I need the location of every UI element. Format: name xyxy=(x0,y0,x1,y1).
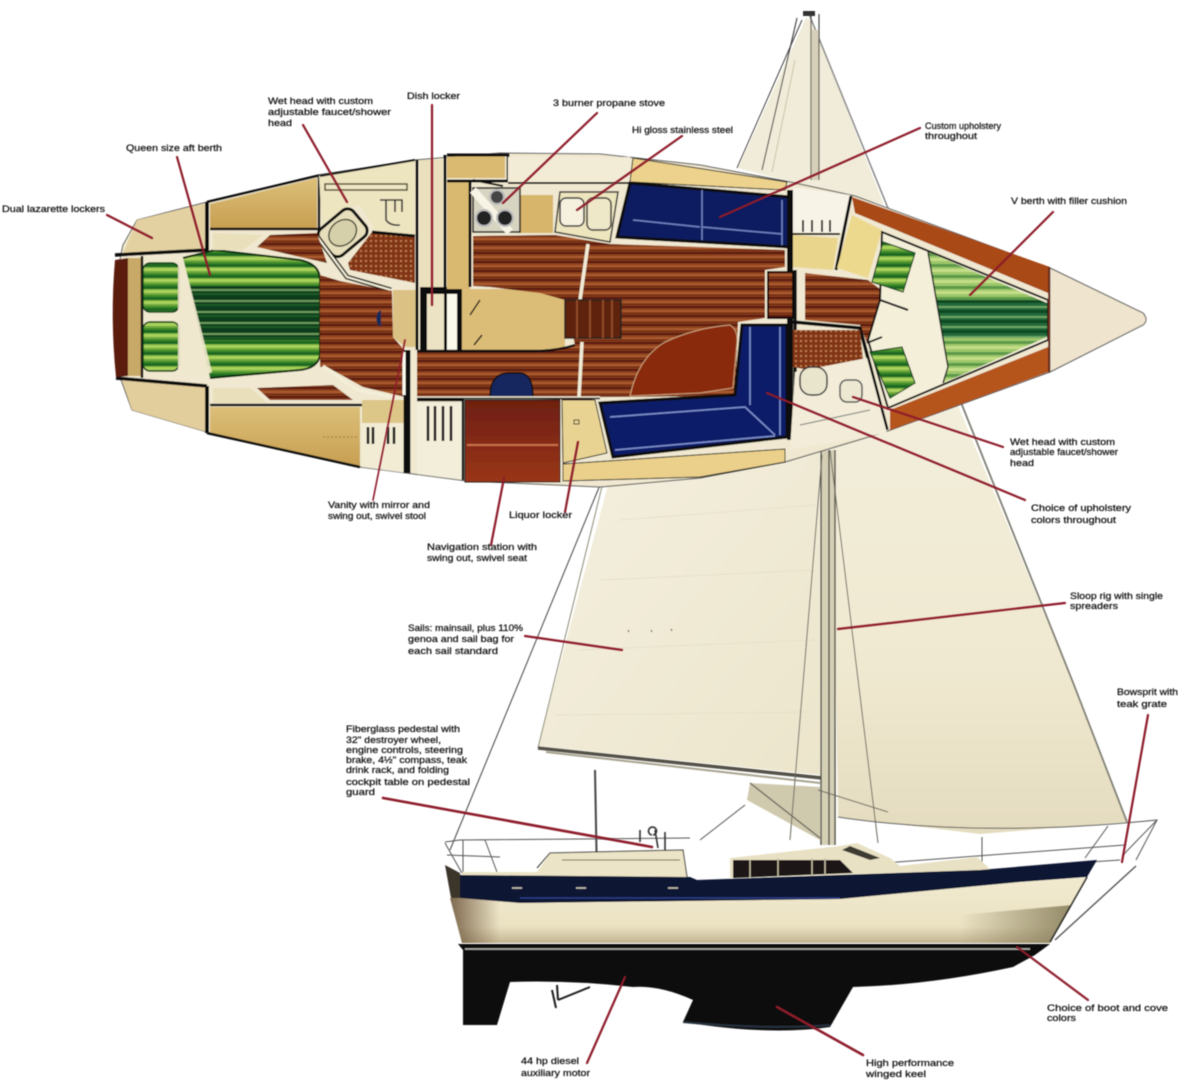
aft cabin wood sole xyxy=(213,233,407,403)
galley sink xyxy=(555,192,618,242)
forward berth base xyxy=(868,232,1048,408)
label: winged keel: High performance xyxy=(866,1058,954,1069)
lower sole edge xyxy=(417,345,600,398)
mainsail xyxy=(538,440,820,775)
label: upholstery xyxy=(925,121,1001,142)
aft storage lockers xyxy=(207,176,362,467)
lazarette lockers xyxy=(115,202,207,433)
galley tan panels xyxy=(447,154,630,350)
label: forward wet head: Wet head with custom xyxy=(1010,437,1115,448)
stern transom xyxy=(445,865,460,898)
yellow upper locker xyxy=(630,158,787,190)
waterline xyxy=(465,948,1030,950)
coach roof and cockpit xyxy=(462,843,990,878)
label: boot and cove: Choice of boot and cove xyxy=(1047,1003,1168,1014)
rails and pulpit xyxy=(445,817,1157,940)
hull topsides xyxy=(450,877,1087,943)
forward bulkhead xyxy=(787,190,793,440)
label: bowsprit: teak grate xyxy=(1117,699,1167,710)
boot stripe top band xyxy=(460,860,1097,903)
label: winged keel xyxy=(865,1058,954,1080)
upper sails above the plan xyxy=(737,11,892,218)
label: pedestal xyxy=(346,724,470,798)
label: navigation station xyxy=(427,542,537,564)
label: forward wet head: head xyxy=(1010,458,1034,469)
V berth cushion xyxy=(925,250,1050,388)
label: aft berth: Queen size aft berth xyxy=(126,143,222,154)
label: pedestal: engine controls, steering xyxy=(346,745,463,756)
berth outline xyxy=(183,250,320,378)
label: sloop rig xyxy=(1070,591,1163,612)
label: sloop rig: Sloop rig with single xyxy=(1070,591,1163,602)
label: dish locker: Dish locker xyxy=(407,91,460,102)
stern trim xyxy=(113,256,183,378)
upper settee xyxy=(617,183,790,247)
label: bowsprit xyxy=(1117,687,1178,710)
label: forward wet head: adjustable faucet/shower xyxy=(1010,447,1118,458)
forward lockers xyxy=(790,187,882,278)
label: pedestal: Fiberglass pedestal with xyxy=(346,724,460,735)
label: V berth: V berth with filler cushion xyxy=(1011,196,1127,207)
label: bowsprit: Bowsprit with xyxy=(1117,687,1178,698)
label: sails: genoa and sail bag for xyxy=(408,634,514,645)
label: aft wet head: head xyxy=(268,118,292,129)
label: sails xyxy=(408,623,524,657)
label: upholstery: throughout xyxy=(925,131,977,142)
liquor locker xyxy=(562,400,607,463)
label: aft wet head: adjustable faucet/shower xyxy=(268,107,391,118)
label: diesel motor: auxiliary motor xyxy=(521,1068,590,1079)
label: forward wet head xyxy=(1010,437,1118,469)
label: pedestal: brake, 4½" compass, teak xyxy=(346,755,467,766)
queen berth cushion xyxy=(180,248,325,380)
vanity block xyxy=(393,290,417,347)
lower yellow locker xyxy=(563,449,785,481)
underwater hull xyxy=(458,944,1050,1031)
label: pedestal: guard xyxy=(346,787,375,798)
label: boot and cove: colors xyxy=(1047,1013,1076,1024)
label: boot and cove xyxy=(1047,1003,1168,1024)
label: liquor locker: Liquor locker xyxy=(509,510,572,521)
navigator seat xyxy=(490,373,533,397)
hull stern shading xyxy=(450,898,500,943)
label: pedestal: 32" destroyer wheel, xyxy=(346,735,441,746)
callout leader lines xyxy=(107,105,1148,1063)
forward wood sole xyxy=(768,270,908,430)
aft small cushions xyxy=(143,263,179,371)
sole divider strips xyxy=(579,244,588,397)
aft head compartment xyxy=(315,160,415,290)
label: upholstery: Custom upholstery xyxy=(925,121,1001,132)
forward head xyxy=(790,358,887,450)
bow tip xyxy=(1050,268,1146,372)
backstay xyxy=(450,485,600,850)
label: vanity: swing out, swivel stool xyxy=(328,511,426,522)
deck plan of interior xyxy=(113,153,1146,487)
L-shaped settee xyxy=(600,325,787,457)
label: upholstery colors: colors throughout xyxy=(1031,515,1116,526)
staysail panel xyxy=(747,783,820,840)
label: pedestal: cockpit table on pedestal xyxy=(346,777,470,788)
label: sloop rig: spreaders xyxy=(1070,601,1118,612)
pedestal and wheel xyxy=(640,827,665,850)
forestay xyxy=(950,375,1127,822)
label: lazarette: Dual lazarette lockers xyxy=(2,204,105,215)
label: vanity xyxy=(328,500,430,522)
label: aft wet head: Wet head with custom xyxy=(268,96,373,107)
navigation station xyxy=(465,400,560,482)
hull bow shading xyxy=(960,905,1072,943)
stove xyxy=(473,188,520,232)
label: vanity: Vanity with mirror and xyxy=(328,500,430,511)
label: navigation station: swing out, swivel seat xyxy=(427,553,527,564)
label: upholstery colors: Choice of upholstery xyxy=(1031,503,1131,514)
label: sails: Sails: mainsail, plus 110% xyxy=(408,623,524,634)
main salon teak sole xyxy=(417,235,785,400)
label: pedestal: drink rack, and folding xyxy=(346,765,449,776)
berth wedge xyxy=(178,258,212,378)
rigging and mast xyxy=(595,450,888,880)
floor grate xyxy=(565,300,621,338)
forward wood wedge accent xyxy=(867,300,908,343)
label: stove: 3 burner propane stove xyxy=(553,98,665,109)
label: steel: Hi gloss stainless steel xyxy=(632,125,733,136)
label: winged keel: winged keel xyxy=(865,1069,926,1080)
label: diesel motor xyxy=(521,1056,590,1079)
genoa sail xyxy=(830,350,1127,834)
V berth edge xyxy=(928,252,948,383)
lower cabinets xyxy=(362,350,463,480)
forward small cushions xyxy=(870,242,915,398)
chain locker trim xyxy=(852,197,1050,430)
dish locker column xyxy=(417,155,462,350)
label: upholstery colors xyxy=(1031,503,1131,526)
label: navigation station: Navigation station with xyxy=(427,542,537,553)
label: aft wet head xyxy=(268,96,391,129)
label: diesel motor: 44 hp diesel xyxy=(521,1056,579,1067)
hull outline xyxy=(115,153,1146,487)
stem edge xyxy=(1050,877,1087,942)
toilet xyxy=(315,206,370,260)
boom xyxy=(538,748,822,778)
sailboat side elevation xyxy=(445,11,1157,1031)
label: sails: each sail standard xyxy=(408,646,498,657)
propeller xyxy=(552,985,590,1008)
dinette table xyxy=(630,325,737,396)
